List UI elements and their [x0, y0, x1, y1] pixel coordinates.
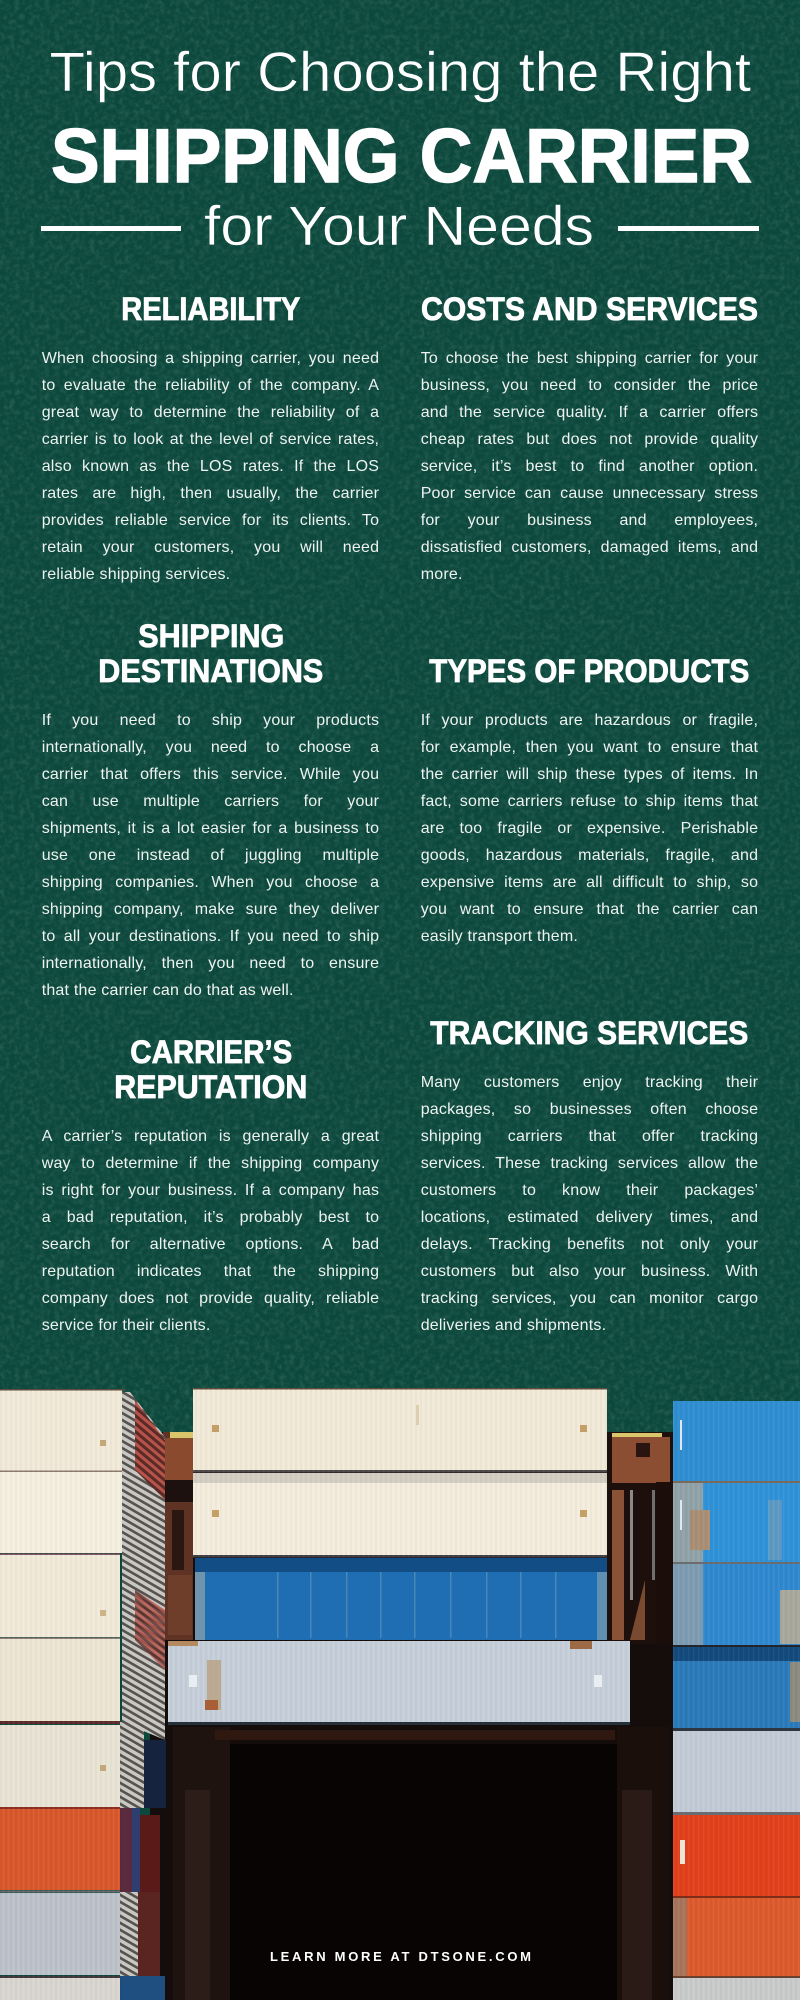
heading: carrier's reputation: REPUTATION	[114, 1069, 307, 1105]
text block: shipping destinations: internationally, then you need to ensure	[42, 955, 379, 972]
centre container third: blue	[195, 1558, 607, 1640]
text block: costs and services: Poor service can cause unnecessary stress	[421, 485, 758, 502]
title line 1: Tips for Choosing the Right	[50, 40, 751, 103]
text block: tracking services: services. These tracking services allow the	[421, 1155, 758, 1172]
text block: carrier's reputation: a bad reputation, it’s probably best to	[42, 1209, 379, 1226]
centre container fourth: grey	[168, 1641, 630, 1725]
text block: shipping destinations	[42, 712, 380, 999]
text block: tracking services	[421, 1074, 758, 1334]
text block: reliability: When choosing a shipping carrier, you need	[42, 350, 379, 367]
heading: types of products: TYPES OF PRODUCTS	[429, 653, 749, 689]
text block: tracking services: customers to know their packages’	[421, 1182, 758, 1199]
text block: costs and services: more.	[421, 566, 463, 583]
text block: reliability: reliable shipping services.	[42, 566, 230, 583]
centre container second: cream	[193, 1473, 607, 1558]
text block: tracking services: deliveries and shipments.	[421, 1317, 606, 1334]
text block: shipping destinations: shipping companies. When you choose a	[42, 874, 379, 891]
text block: reliability	[42, 350, 380, 583]
text block: types of products: expensive items are all difficult to ship, so	[421, 874, 758, 891]
text block: tracking services: locations, estimated delivery times, and	[421, 1209, 758, 1226]
text block: reliability: also known as the LOS rates. If the LOS	[42, 458, 379, 475]
title line 3: for Your Needs	[204, 194, 594, 257]
text block: costs and services: for your business and employees,	[421, 512, 758, 529]
heading: shipping destinations: SHIPPING	[138, 618, 284, 654]
panel: shipping destinations	[42, 618, 380, 999]
panel: carrier's reputation	[42, 1034, 379, 1334]
heading: carrier's reputation	[114, 1034, 307, 1105]
panel: costs and services	[420, 291, 758, 583]
text block: shipping destinations: If you need to ship your products	[42, 712, 379, 729]
heading: shipping destinations	[98, 618, 323, 689]
text block: shipping destinations: carrier that offers this service. While you	[42, 766, 379, 783]
panel: reliability	[42, 291, 380, 583]
heading: shipping destinations: DESTINATIONS	[98, 653, 323, 689]
text block: tracking services: delays. Tracking benefits not only your	[421, 1236, 758, 1253]
title	[41, 40, 759, 257]
text block: reliability: great way to determine the reliability of a	[42, 404, 379, 421]
text block: types of products	[420, 712, 758, 945]
text block: carrier's reputation: reputation indicates that the shipping	[42, 1263, 379, 1280]
footer call to action: LEARN MORE AT DTSONE.COM	[270, 1949, 531, 1964]
text block: costs and services	[420, 350, 758, 583]
text block: reliability: retain your customers, you will need	[42, 539, 379, 556]
text block: costs and services: dissatisfied customers, damaged items, and	[421, 539, 758, 556]
heading: carrier's reputation: CARRIER’S	[130, 1034, 292, 1070]
text block: types of products: goods, hazardous materials, fragile, and	[421, 847, 758, 864]
text block: tracking services: tracking services, you can monitor cargo	[421, 1290, 758, 1307]
left rule	[41, 226, 181, 231]
text block: types of products: the carrier will ship these types of items. In	[421, 766, 758, 783]
text block: shipping destinations: that the carrier can do that as well.	[42, 982, 294, 999]
text block: tracking services: customers but also your business. With	[421, 1263, 758, 1280]
text block: carrier's reputation: search for alternative options. A bad	[42, 1236, 379, 1253]
text block: shipping destinations: internationally, you need to choose a	[42, 739, 379, 756]
centre container top: cream	[193, 1388, 607, 1472]
text block: types of products: are too fragile or expensive. Perishable	[421, 820, 758, 837]
text block: shipping destinations: shipping company, make sure they deliver	[42, 901, 379, 918]
text block: tracking services: shipping carriers that offer tracking	[421, 1128, 758, 1145]
text block: types of products: easily transport them.	[421, 928, 578, 945]
text block: types of products: If your products are hazardous or fragile,	[421, 712, 758, 729]
illustration: stacked shipping containers	[0, 1388, 800, 2000]
text block: types of products: you want to ensure that the carrier can	[421, 901, 758, 918]
text block: costs and services: cheap rates but does not provide quality	[421, 431, 758, 448]
left container stack side faces	[120, 1392, 166, 2000]
right rule	[618, 226, 759, 231]
right container stack	[673, 1401, 800, 2000]
text block: costs and services: service, it’s best to find another option.	[421, 458, 758, 475]
text block: tracking services: Many customers enjoy tracking their	[421, 1074, 758, 1091]
text block: costs and services: business, you need to consider the price	[421, 377, 758, 394]
text block: carrier's reputation: company does not provide quality, reliable	[42, 1290, 379, 1307]
text block: types of products: fact, some carriers refuse to ship items that	[421, 793, 758, 810]
title line 2: SHIPPING CARRIER	[51, 114, 752, 199]
text block: shipping destinations: to all your destinations. If you need to ship	[42, 928, 379, 945]
text block: tracking services: packages, so businesses often choose	[421, 1101, 758, 1118]
dark ship structure	[150, 1432, 680, 2000]
text block: carrier's reputation: A carrier’s reputation is generally a great	[42, 1128, 379, 1145]
text block: reliability: rates are high, then usually, the carrier	[42, 485, 379, 502]
text block: shipping destinations: use one instead of juggling multiple	[42, 847, 379, 864]
heading: costs and services: COSTS AND SERVICES	[421, 291, 758, 327]
text block: reliability: provides reliable service for its clients. To	[42, 512, 379, 529]
text block: carrier's reputation: way to determine if the shipping company	[42, 1155, 379, 1172]
text block: shipping destinations: can use multiple carriers for your	[42, 793, 379, 810]
text block: shipping destinations: shipments, it is a lot easier for a business to	[42, 820, 379, 837]
heading: tracking services: TRACKING SERVICES	[430, 1015, 748, 1051]
brown lashing bridge right	[607, 1432, 673, 1644]
text block: carrier's reputation: service for their clients.	[42, 1317, 210, 1334]
text block: reliability: carrier is to look at the level of service rates,	[42, 431, 379, 448]
text block: types of products: for example, then you want to ensure that	[421, 739, 758, 756]
heading: reliability: RELIABILITY	[121, 291, 300, 327]
panel: tracking services	[421, 1015, 758, 1334]
brown lashing bridge left	[163, 1432, 193, 1640]
text block: carrier's reputation	[42, 1128, 379, 1334]
left container stack fronts	[0, 1389, 125, 2000]
text block: costs and services: and the service quality. If a carrier offers	[421, 404, 758, 421]
text block: carrier's reputation: is right for your business. If a company has	[42, 1182, 379, 1199]
text block: costs and services: To choose the best shipping carrier for your	[421, 350, 758, 367]
panel: types of products	[420, 653, 758, 945]
text block: reliability: to evaluate the reliability of the company. A	[42, 377, 379, 394]
